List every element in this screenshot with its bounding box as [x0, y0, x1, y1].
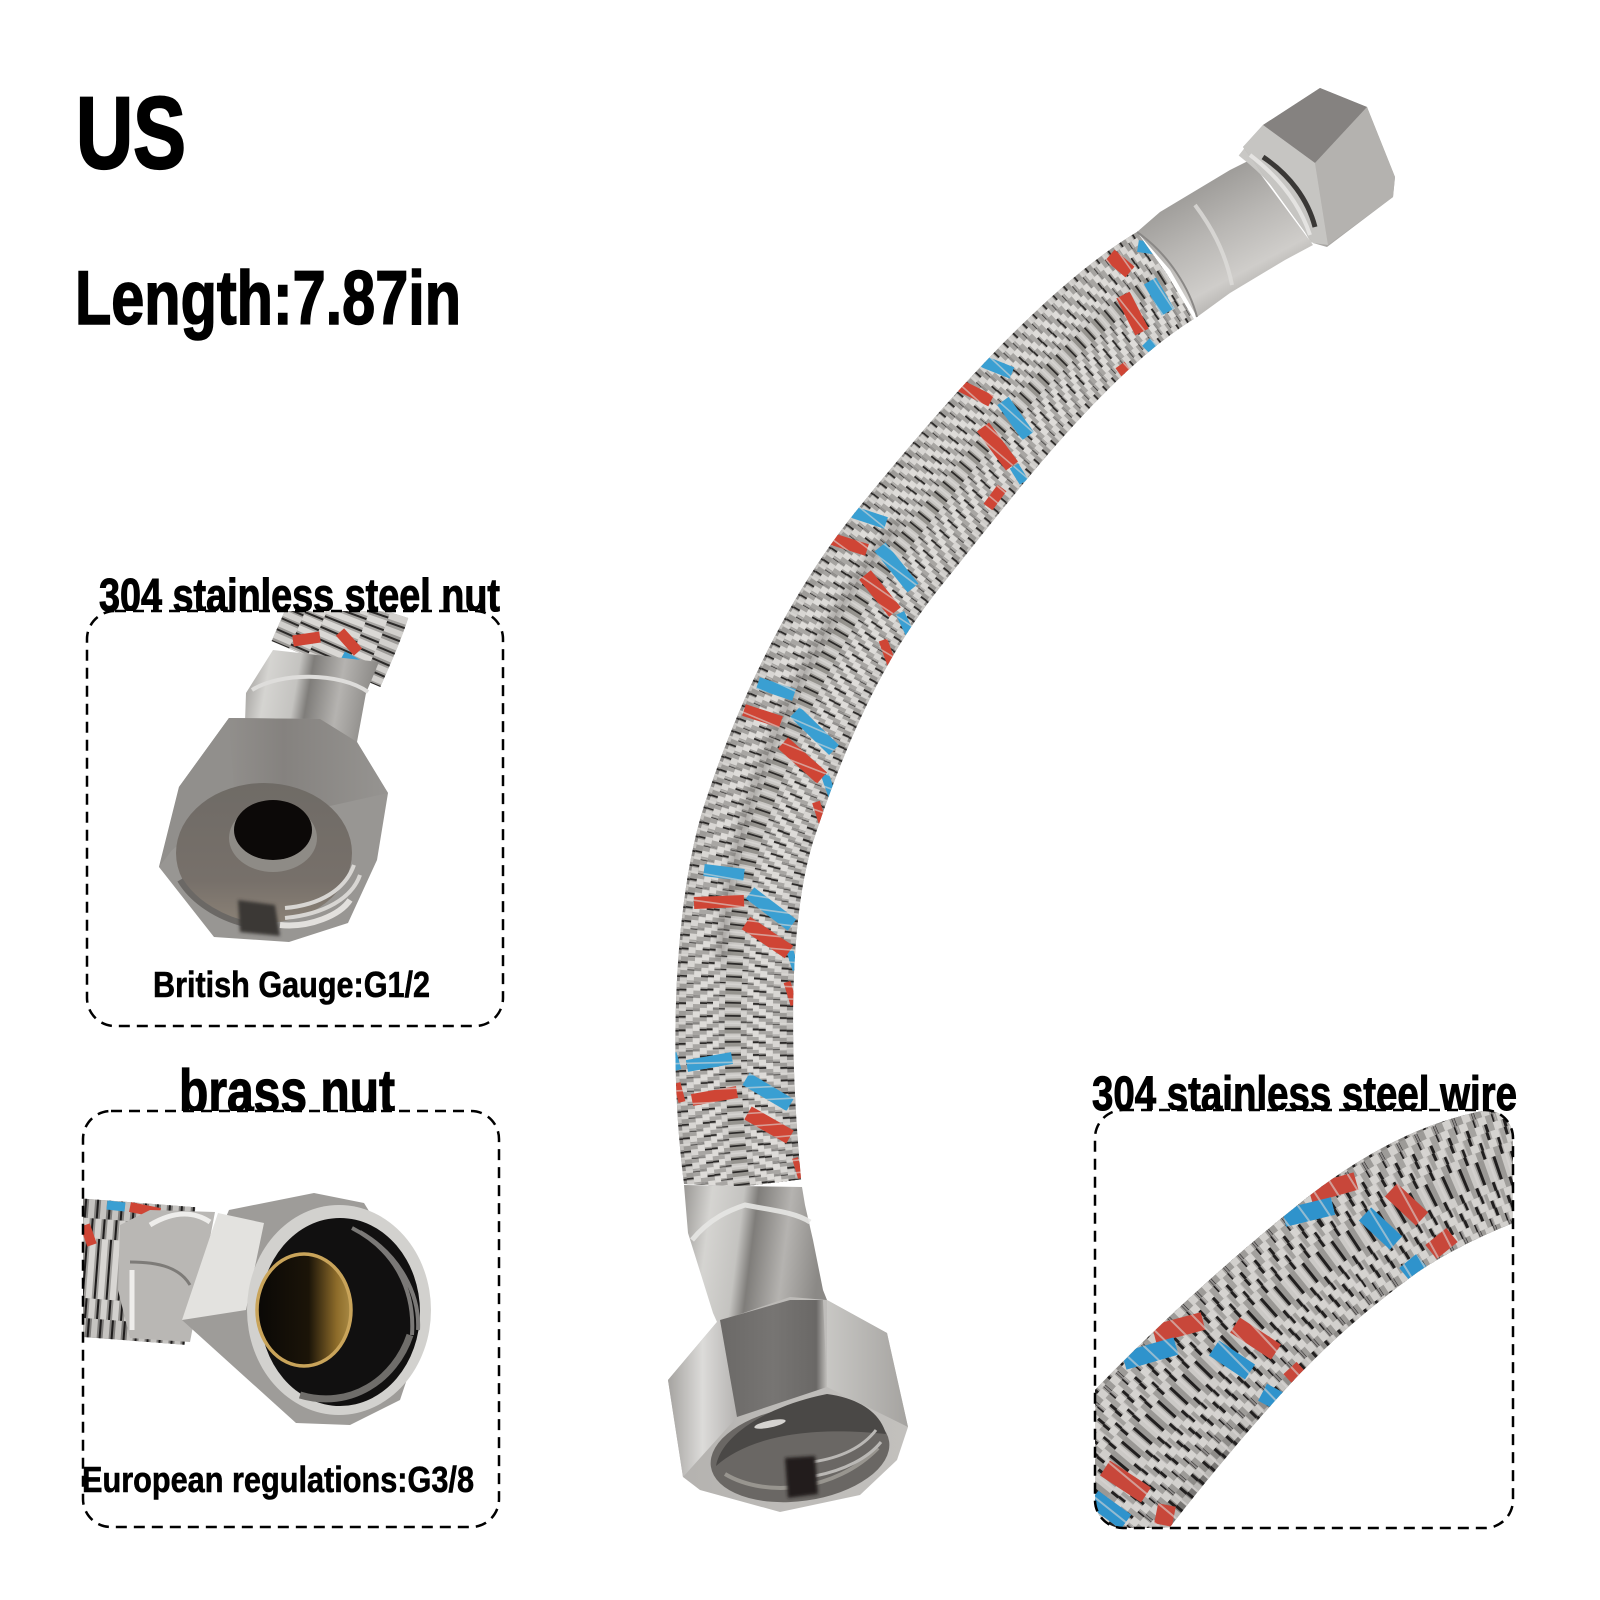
- photo: brass nut: [60, 1193, 431, 1425]
- red and blue marker stripes: [673, 246, 1168, 1178]
- bottom ferrule: [684, 1185, 827, 1322]
- title: US: US: [76, 76, 186, 190]
- dashed frame: [83, 1111, 499, 1527]
- hose braid and stripes: [673, 246, 1168, 1186]
- bottom hex nut: [668, 1297, 908, 1513]
- dashed frame: [1095, 1110, 1513, 1528]
- panel: stainless steel wire detail: [1070, 1110, 1530, 1528]
- title: brass nut: brass nut: [179, 1058, 395, 1125]
- top ferrule: [1137, 150, 1317, 317]
- photo: stainless nut: [159, 600, 388, 942]
- main product: braided hose: [668, 88, 1395, 1513]
- caption: British Gauge: British Gauge:G1/2: [153, 964, 430, 1005]
- photo: braid close-up: [1070, 1158, 1530, 1525]
- braid strands over stripes: [733, 274, 1167, 1186]
- caption: European regulations: European regulations:G3/8: [82, 1459, 474, 1500]
- dashed frame: [87, 611, 503, 1026]
- panel: G1/2 stainless nut detail: [87, 600, 503, 1026]
- panel: G3/8 brass nut detail: [60, 1111, 499, 1527]
- title: 304 stainless steel nut: 304 stainless steel nut: [99, 569, 500, 621]
- top hex nut: [1243, 88, 1395, 247]
- heading: length: Length:7.87in: [75, 256, 461, 341]
